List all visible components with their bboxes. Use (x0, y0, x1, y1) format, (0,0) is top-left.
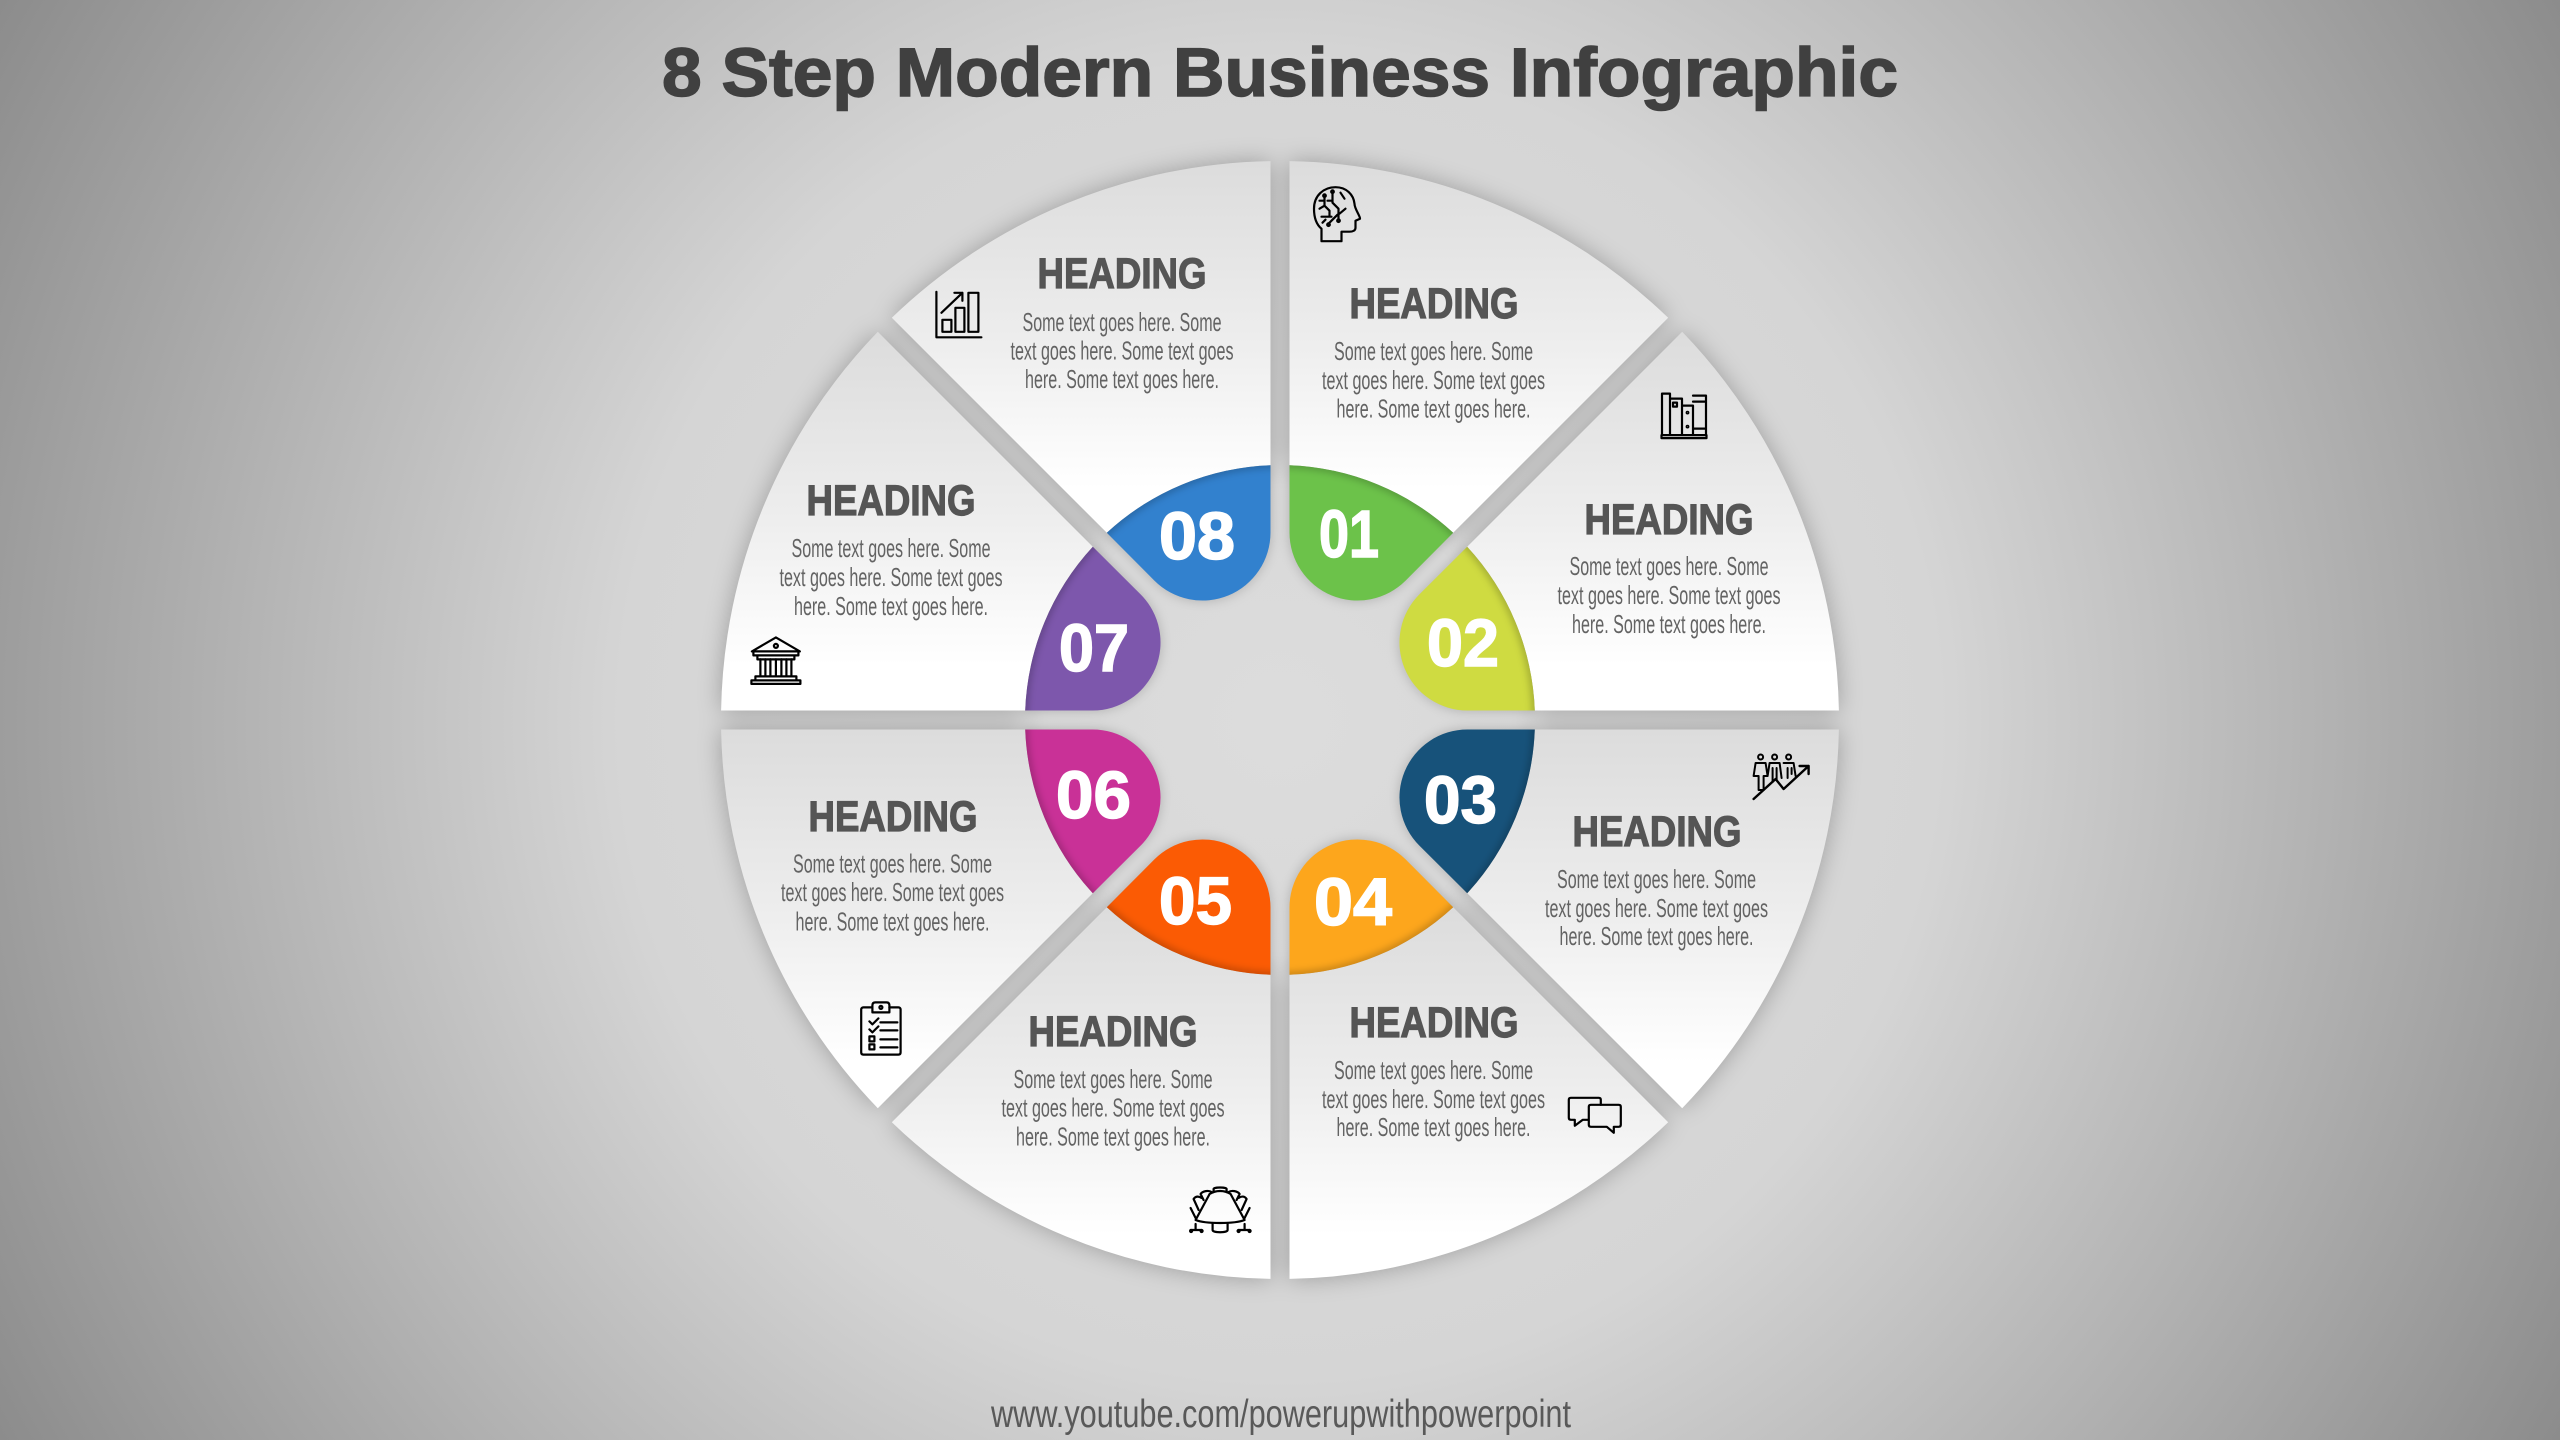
badge 07 (1025, 547, 1161, 710)
sector 05 (892, 907, 1270, 1279)
badge 08 (1107, 465, 1270, 601)
body text 01: Some text goes here. Some (1334, 336, 1533, 366)
body text 01 (1322, 336, 1545, 424)
sector 03 (1467, 730, 1839, 1108)
badge 04 (1290, 839, 1453, 975)
icon: bank building (751, 637, 800, 684)
heading 08: HEADING (1038, 250, 1206, 298)
body text 07: Some text goes here. Some (792, 533, 990, 563)
body text 02: Some text goes here. Some (1570, 551, 1768, 581)
badge 05 (1107, 839, 1270, 975)
body text 08: Some text goes here. Some (1022, 307, 1222, 337)
footer url: www.youtube.com/powerupwithpowerpoint (990, 1393, 1571, 1436)
panel: step 03 (1399, 730, 1839, 1108)
body text 08 (1010, 307, 1234, 394)
body text 08: text goes here. Some text goes (1010, 336, 1234, 366)
body text 03 (1545, 864, 1768, 951)
heading 03: HEADING (1572, 808, 1742, 856)
panel: step 02 (1399, 332, 1839, 710)
body text 04: Some text goes here. Some (1334, 1055, 1533, 1085)
icon: speech bubbles (1569, 1098, 1621, 1133)
body text 04 (1322, 1055, 1545, 1142)
icon: meeting table (1190, 1188, 1251, 1232)
panel: step 08 (892, 161, 1270, 601)
body text 02: text goes here. Some text goes (1558, 580, 1780, 610)
number 03: 03 (1424, 763, 1497, 838)
heading 02: HEADING (1584, 496, 1754, 544)
body text 06: text goes here. Some text goes (781, 877, 1004, 907)
badge 03 (1399, 730, 1535, 893)
panel: step 06 (721, 730, 1161, 1108)
body text 02: here. Some text goes here. (1572, 609, 1766, 639)
body text 06 (781, 848, 1004, 936)
sector 02 (1467, 332, 1839, 710)
badge 02 (1399, 547, 1535, 710)
body text 07: text goes here. Some text goes (780, 562, 1002, 592)
icon: books (1662, 394, 1706, 438)
body text 04: here. Some text goes here. (1336, 1112, 1530, 1142)
icon: team growth arrow (1754, 754, 1809, 799)
icon: bar chart arrow (936, 292, 981, 337)
panel: step 01 (1290, 161, 1668, 601)
panel: step 04 (1290, 839, 1668, 1279)
body text 04: text goes here. Some text goes (1322, 1084, 1545, 1114)
sector 01 (1290, 161, 1668, 533)
body text 03: Some text goes here. Some (1557, 864, 1756, 894)
body text 03: here. Some text goes here. (1560, 921, 1754, 951)
sector 08 (892, 161, 1270, 533)
icon: clipboard checklist (861, 1002, 901, 1055)
number 02: 02 (1427, 606, 1499, 681)
sector 06 (721, 730, 1093, 1108)
number 08: 08 (1159, 499, 1235, 574)
sector 04 (1290, 907, 1668, 1279)
body text 06: here. Some text goes here. (796, 906, 990, 936)
heading 05: HEADING (1028, 1008, 1198, 1056)
panel: step 05 (892, 839, 1270, 1279)
body text 05 (1002, 1064, 1224, 1152)
body text 03: text goes here. Some text goes (1545, 893, 1768, 923)
number 01: 01 (1319, 497, 1379, 572)
heading 07: HEADING (806, 477, 976, 525)
heading 01: HEADING (1350, 280, 1518, 328)
heading 04: HEADING (1350, 999, 1518, 1047)
body text 08: here. Some text goes here. (1025, 364, 1219, 394)
body text 05: here. Some text goes here. (1016, 1122, 1210, 1152)
body text 05: Some text goes here. Some (1014, 1064, 1212, 1094)
title: 8 Step Modern Business Infographic (662, 34, 1898, 111)
body text 05: text goes here. Some text goes (1002, 1092, 1224, 1122)
body text 07 (780, 533, 1002, 621)
badge 01 (1290, 465, 1453, 601)
badge 06 (1025, 730, 1161, 893)
body text 01: here. Some text goes here. (1336, 394, 1530, 424)
body text 07: here. Some text goes here. (794, 591, 988, 621)
number 04: 04 (1314, 865, 1392, 940)
body text 06: Some text goes here. Some (793, 848, 992, 878)
heading 06: HEADING (808, 793, 978, 841)
panel: step 07 (721, 332, 1161, 710)
sector 07 (721, 332, 1093, 710)
number 07: 07 (1059, 611, 1129, 686)
body text 01: text goes here. Some text goes (1322, 365, 1545, 395)
body text 02 (1558, 551, 1780, 639)
number 05: 05 (1159, 864, 1232, 939)
number 06: 06 (1056, 758, 1131, 833)
icon: brain head (1314, 187, 1360, 241)
